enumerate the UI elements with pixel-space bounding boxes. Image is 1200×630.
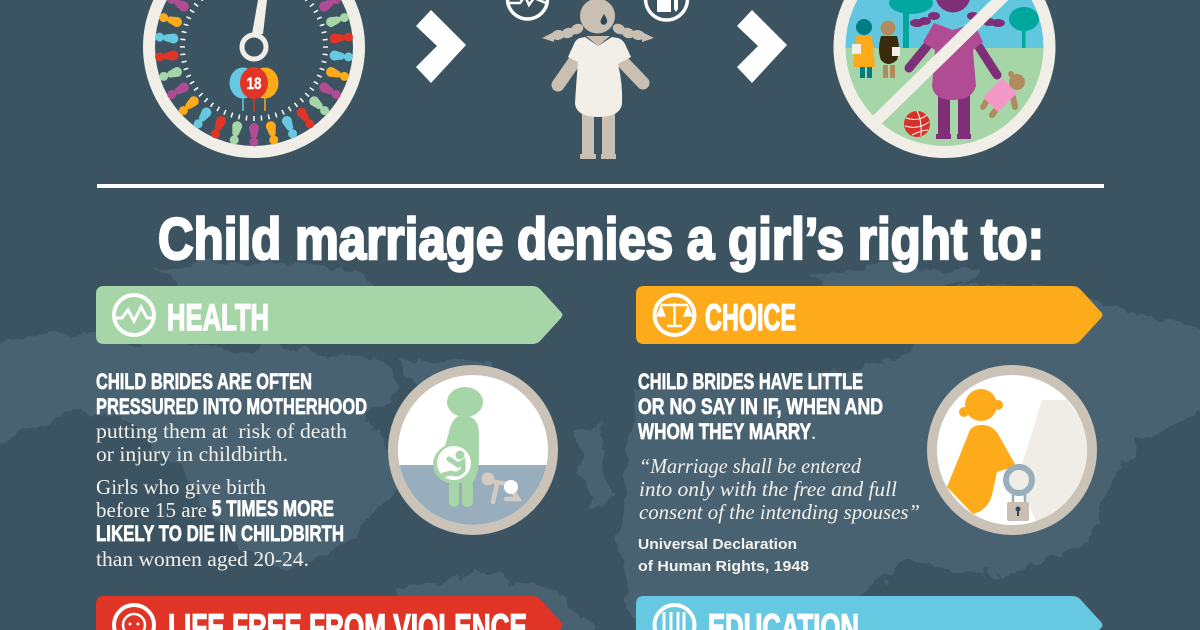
heading: choice: CHOICE (705, 297, 796, 338)
arms (558, 62, 643, 85)
volleyball (904, 111, 930, 137)
playful girl arms (909, 45, 997, 75)
crying girl illustration (508, 0, 688, 159)
legs (582, 112, 615, 154)
icon: scales (654, 295, 694, 335)
shoes (580, 154, 616, 159)
choice text block: of Human Rights, 1948 (638, 558, 809, 575)
balloons with 18: 18 (246, 74, 262, 93)
gauge needle (252, 0, 267, 34)
health text block: PRESSURED INTO MOTHERHOOD (96, 394, 367, 419)
adult figure (1022, 400, 1087, 521)
gauge ring (149, 0, 359, 152)
gauge hub (242, 35, 266, 59)
prohibition ring (840, 0, 1050, 152)
balloons with 18 (230, 67, 278, 112)
health text block: than women aged 20-24. (96, 547, 309, 571)
choice text block (638, 369, 920, 575)
padlock (1007, 494, 1029, 521)
crawling baby (482, 472, 518, 502)
head with tear (580, 0, 615, 34)
health text block: before 15 are (96, 498, 207, 522)
collar (586, 36, 610, 46)
icon: books (654, 605, 694, 630)
arrow: chevron 1 (416, 10, 466, 83)
prohibition slash (877, 0, 1010, 120)
world map background (0, 262, 1200, 630)
sky (840, 0, 1050, 48)
child in brown (879, 20, 900, 78)
ring of girl figures (155, 0, 353, 146)
clock gauge illustration (149, 0, 359, 152)
health text block (96, 369, 367, 571)
teddy bear (983, 71, 1025, 115)
banner: choice (636, 286, 1102, 344)
tree left (889, 0, 933, 48)
icon: health (508, 0, 548, 19)
panel: health (96, 286, 562, 571)
choice illustration (932, 370, 1095, 530)
banner: education (636, 596, 1102, 630)
banner: violence (96, 596, 562, 630)
gauge tick marks (182, 0, 326, 118)
choice text block: CHILD BRIDES HAVE LITTLE (638, 369, 863, 394)
choice text block: . (811, 420, 816, 444)
choice text block: consent of the intending spouses” (639, 500, 920, 524)
panel: education (636, 596, 1102, 630)
playful girl legs (938, 95, 970, 135)
health text block: or injury in childbirth. (96, 442, 288, 466)
choice text block: into only with the free and full (639, 477, 897, 501)
child in orange (852, 19, 875, 78)
choice text block: “Marriage shall be entered (639, 454, 861, 478)
unborn baby (437, 446, 471, 480)
woman head (959, 389, 1003, 421)
chain (1006, 467, 1032, 493)
health text block: CHILD BRIDES ARE OFTEN (96, 369, 312, 394)
choice text block: Universal Declaration (638, 536, 797, 553)
grass (846, 48, 1044, 146)
braids (542, 22, 654, 42)
icon: girl face (114, 605, 154, 630)
health text block: 5 TIMES MORE (212, 496, 334, 521)
no childhood illustration (840, 0, 1050, 158)
health illustration (390, 370, 560, 535)
divider (97, 184, 1104, 188)
choice text block: OR NO SAY IN IF, WHEN AND (638, 394, 883, 419)
panel: life free from violence (96, 596, 562, 630)
icon: heartbeat (114, 295, 154, 335)
tree right (1009, 7, 1039, 48)
main heading: Child marriage denies a girl’s right to: (158, 207, 1044, 272)
playful girl head (936, 0, 970, 12)
panel: choice (636, 286, 1102, 575)
icon: books (646, 0, 688, 20)
woman body (947, 425, 1016, 514)
heading: health: HEALTH (167, 297, 269, 338)
health text block: putting them at risk of death (96, 419, 348, 443)
playful girl dress (923, 23, 983, 100)
health text block: LIKELY TO DIE IN CHILDBIRTH (96, 521, 344, 546)
arrow: chevron 2 (737, 10, 787, 83)
playful girl braids (910, 12, 1005, 27)
health text block: Girls who give birth (96, 475, 266, 499)
choice text block: WHOM THEY MARRY (638, 419, 811, 444)
pregnant woman (433, 387, 483, 507)
dress (568, 37, 631, 117)
banner: health (96, 286, 562, 344)
playful girl shoes (936, 134, 971, 139)
